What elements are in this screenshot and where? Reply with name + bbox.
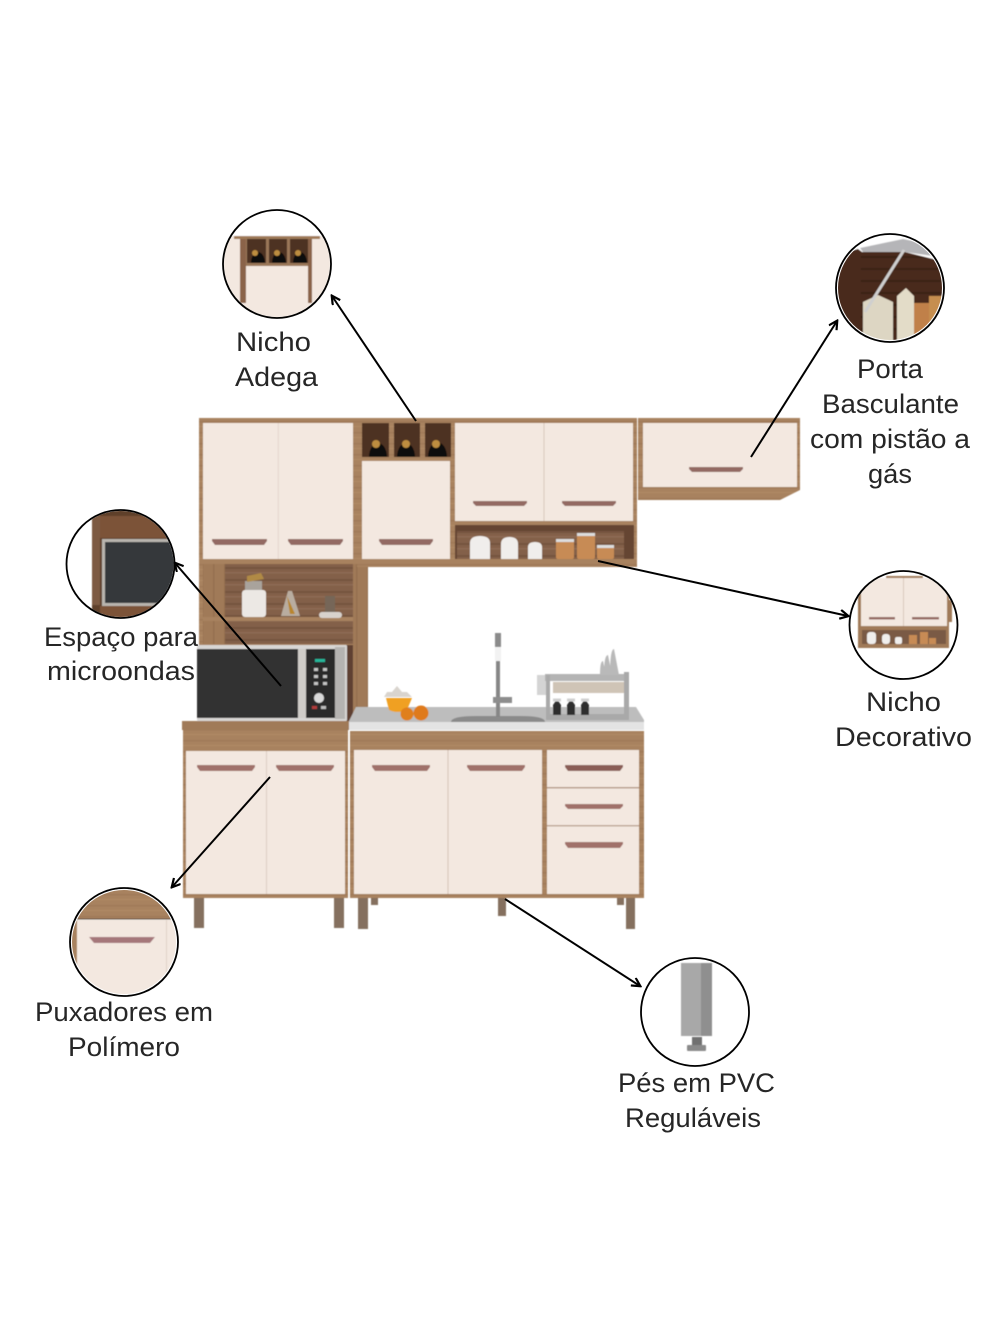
- arrow: microwave space: [175, 563, 281, 686]
- label: [235, 327, 319, 392]
- tall upper cabinet: [199, 418, 368, 564]
- label: Basculante: [822, 389, 959, 419]
- callout: Porta Basculante: [810, 233, 971, 489]
- label: [618, 1068, 775, 1133]
- label: com pistão a: [810, 424, 971, 454]
- wall cabinet with gas piston door: [638, 418, 800, 500]
- icon: microwave niche detail: [92, 510, 176, 620]
- circle outline: [223, 210, 331, 318]
- circle outline: [70, 888, 178, 996]
- label: [35, 997, 213, 1062]
- sink countertop with faucet, juicer and dish rack: [349, 633, 644, 730]
- label: Espaço para: [44, 622, 199, 652]
- icon: gas piston detail: [838, 238, 942, 340]
- label: Porta: [857, 354, 924, 384]
- microwave: [197, 645, 347, 721]
- callout: Puxadores em Polímero: [35, 886, 213, 1062]
- label: [835, 687, 972, 752]
- callout: Nicho Adega: [222, 209, 332, 392]
- arrow: decorative niche: [598, 561, 848, 616]
- left base cabinet: [182, 721, 349, 928]
- arrow: polymer handles: [172, 777, 270, 887]
- icon: wine niche detail: [224, 235, 330, 317]
- infographic canvas: [37, 209, 971, 1132]
- label: Reguláveis: [625, 1103, 761, 1133]
- label: Decorativo: [835, 722, 972, 752]
- label: Adega: [235, 362, 319, 392]
- circle outline: [641, 958, 749, 1066]
- circle outline: [850, 571, 958, 679]
- center wine niche cabinet: [357, 418, 456, 567]
- arrow: gas piston door: [751, 321, 837, 457]
- label: Puxadores em: [35, 997, 213, 1027]
- label: Pés em PVC: [618, 1068, 775, 1098]
- arrow: PVC feet: [505, 899, 640, 986]
- cabinet legs: [358, 898, 635, 929]
- label: Nicho: [866, 687, 941, 717]
- decorative open niche with shelf: [199, 560, 368, 721]
- arrow: wine niche: [332, 296, 416, 421]
- callout: Nicho Decorativo: [835, 571, 972, 752]
- circle outline: [66, 510, 174, 618]
- label: microondas: [47, 656, 195, 686]
- label: Polímero: [68, 1032, 180, 1062]
- label: gás: [868, 459, 912, 489]
- icon: adjustable PVC foot: [681, 963, 712, 1051]
- label: [44, 622, 199, 686]
- circle outline: [836, 234, 944, 342]
- kitchen unit illustration: [182, 418, 800, 929]
- upper two-door cabinet: [452, 418, 637, 567]
- label: [810, 354, 971, 489]
- right base cabinet with doors and drawers: [350, 731, 644, 898]
- icon: handle detail: [72, 890, 176, 994]
- callout: Pés em PVC Reguláveis: [618, 958, 775, 1133]
- callout: Espaço para microondas: [44, 510, 199, 686]
- icon: decorative niche detail: [858, 576, 952, 648]
- label: Nicho: [236, 327, 311, 357]
